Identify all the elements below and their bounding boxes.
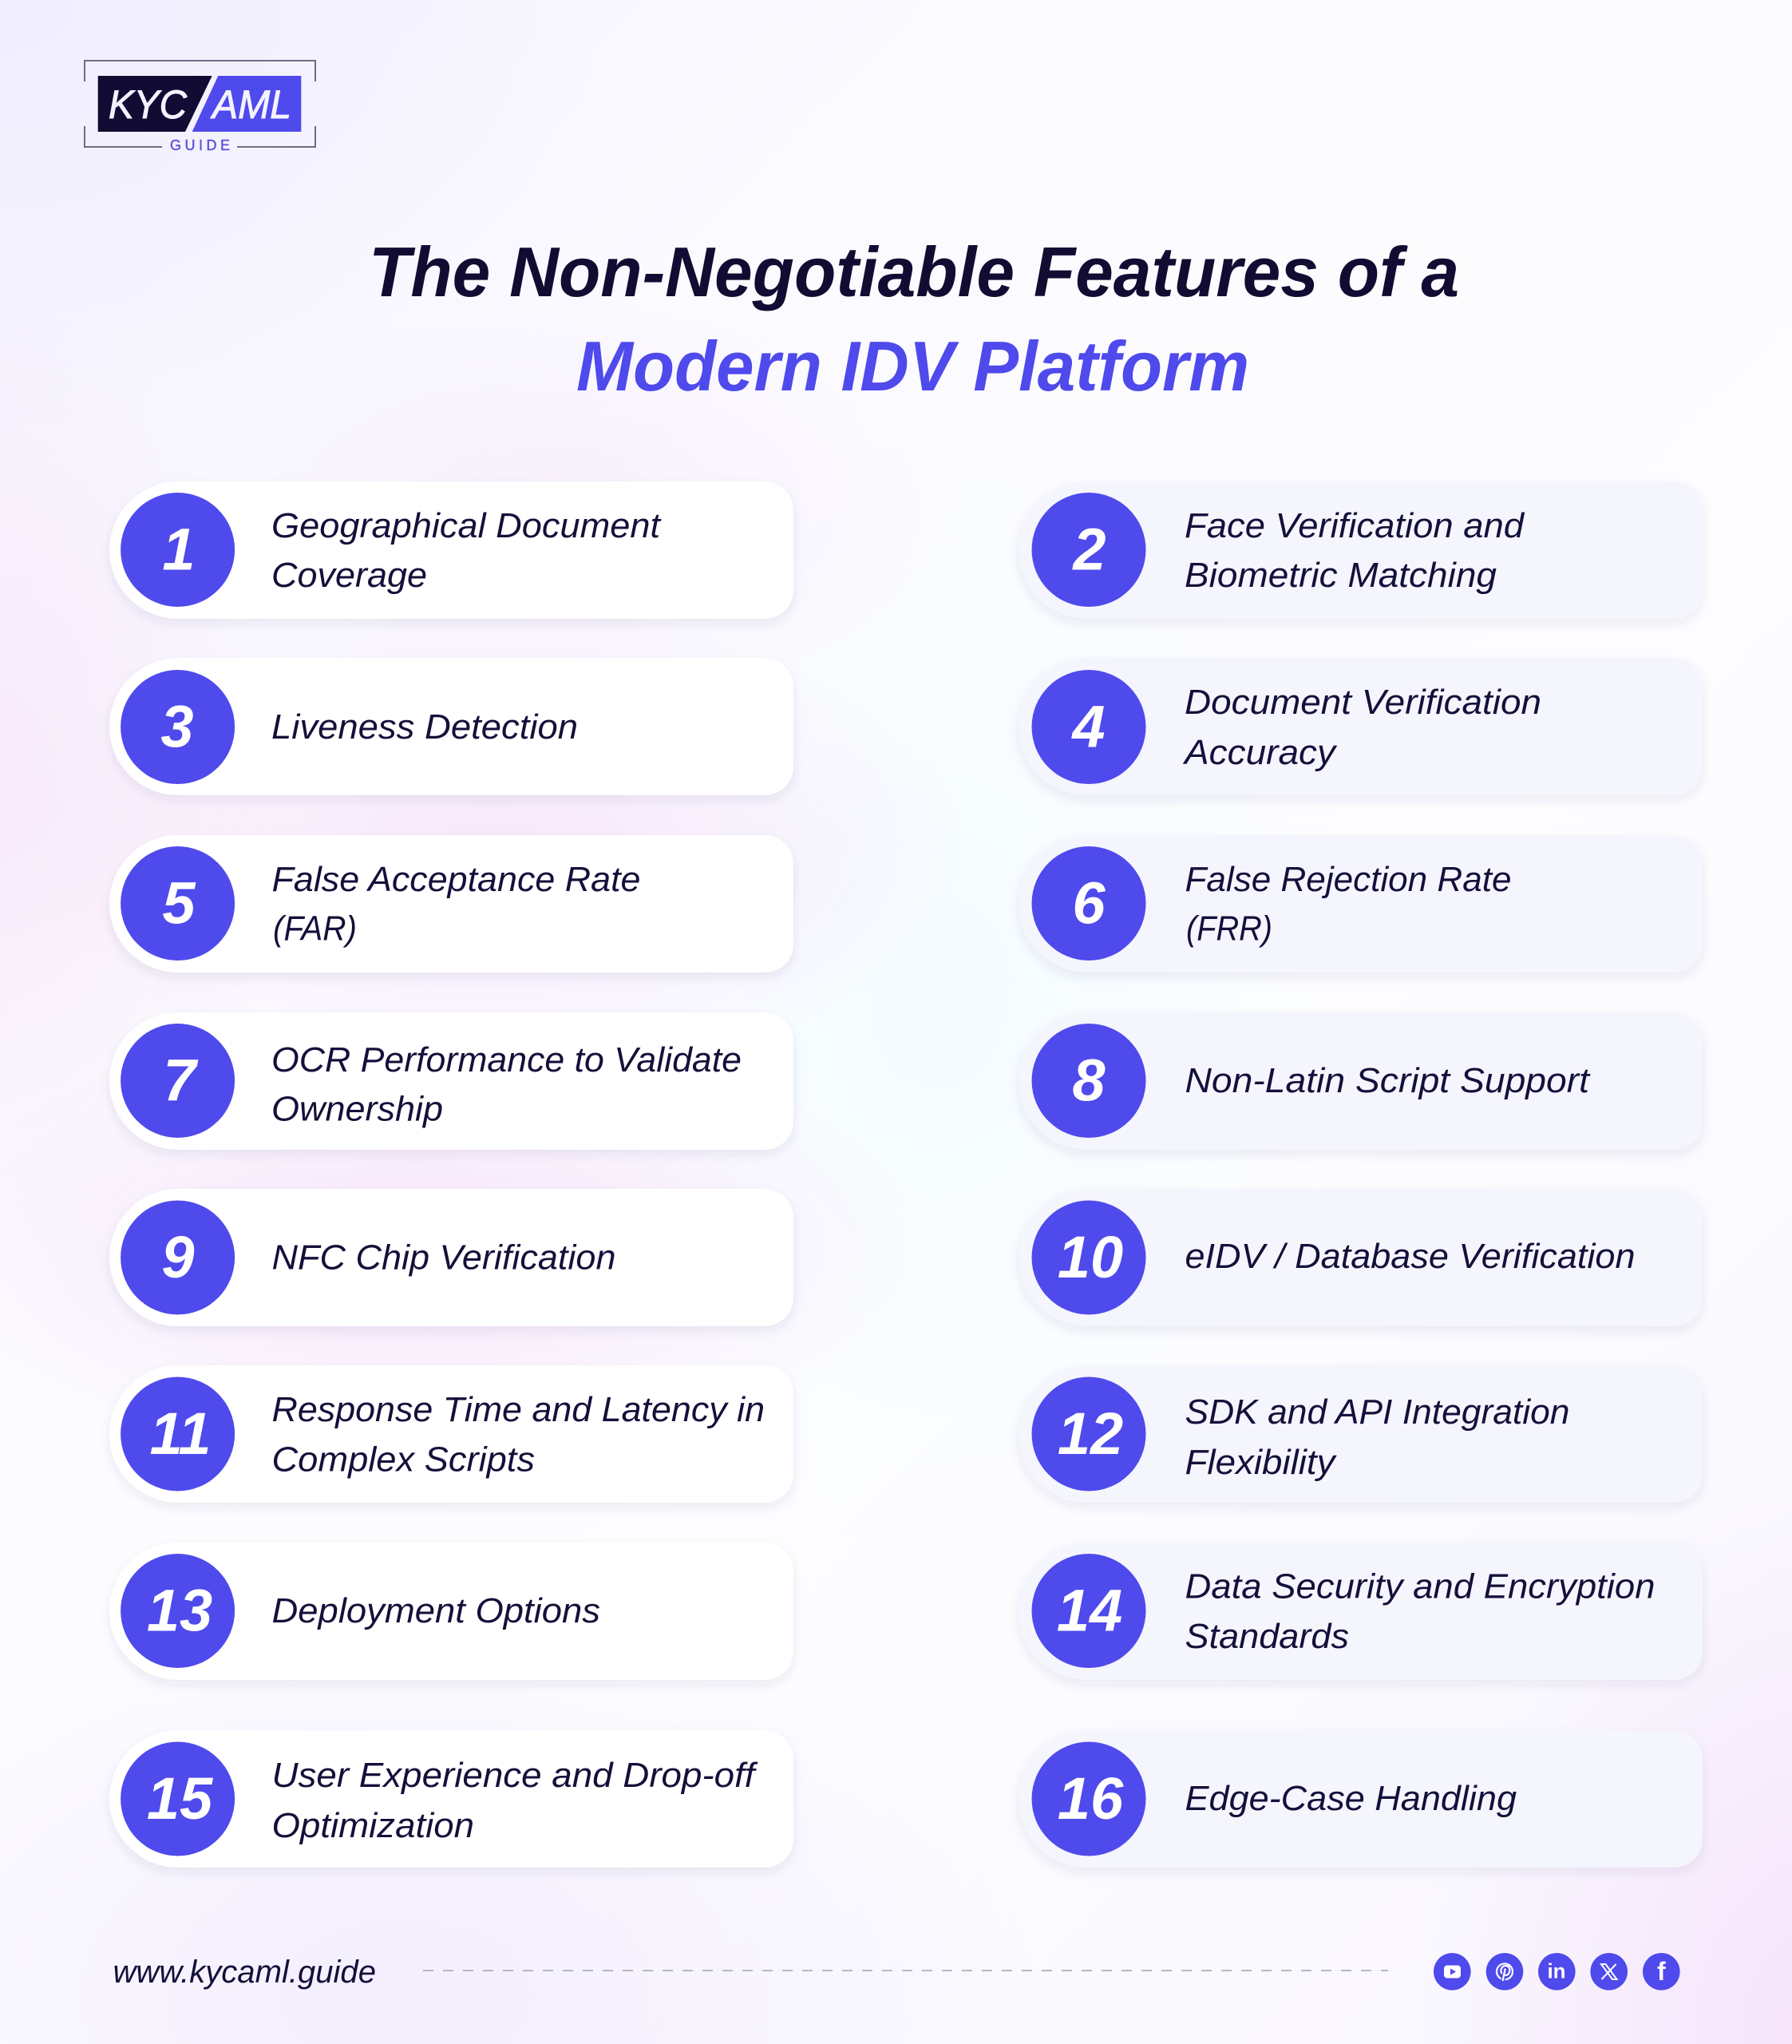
feature 5: [109, 835, 793, 972]
feature 13: [109, 1543, 793, 1680]
icon: linkedin: in: [1547, 1959, 1566, 1983]
feature 14: 14: [1057, 1578, 1122, 1643]
feature 14: [1019, 1543, 1703, 1680]
feature 6: False Rejection Rate: [1185, 860, 1512, 899]
feature 1: [109, 481, 793, 619]
feature 10: [1019, 1189, 1703, 1326]
feature 2: Face Verification and: [1185, 506, 1525, 545]
feature 5: False Acceptance Rate: [271, 860, 640, 899]
feature 7: OCR Performance to Validate: [271, 1040, 742, 1079]
feature 9: [109, 1189, 793, 1326]
logo: KYC/AML Guide: GUIDE: [170, 137, 230, 153]
feature 6: (FRR): [1186, 909, 1272, 949]
feature 15: [109, 1730, 793, 1868]
icon: youtube: [1434, 1953, 1471, 1991]
feature 10: 10: [1058, 1224, 1123, 1290]
feature 6: 6: [1072, 870, 1106, 936]
feature 7: 7: [163, 1048, 199, 1113]
feature 13: Deployment Options: [271, 1591, 600, 1630]
footer dashed line: [423, 1970, 1388, 1971]
feature 16: [1019, 1730, 1703, 1868]
feature 4: [1019, 658, 1703, 795]
feature 8: [1019, 1012, 1703, 1150]
feature 9: NFC Chip Verification: [271, 1238, 616, 1278]
feature 12: Flexibility: [1185, 1443, 1338, 1482]
feature 2: [1019, 481, 1703, 619]
icon: pinterest: [1486, 1953, 1523, 1991]
feature 11: Complex Scripts: [271, 1440, 535, 1479]
feature 15: User Experience and Drop-off: [271, 1756, 758, 1795]
feature 4: Accuracy: [1182, 733, 1338, 772]
feature 11: 11: [150, 1400, 211, 1467]
feature 6: [1019, 835, 1703, 972]
feature 1: Geographical Document: [271, 506, 662, 545]
feature 5: (FAR): [273, 909, 357, 949]
feature 8: Non-Latin Script Support: [1185, 1061, 1591, 1100]
title: [369, 232, 1459, 406]
feature 1: Coverage: [271, 556, 427, 595]
feature 11: Response Time and Latency in: [271, 1390, 765, 1429]
title: Modern IDV Platform: [576, 327, 1249, 406]
feature 15: 15: [147, 1765, 214, 1832]
feature 3: [109, 658, 793, 795]
feature 3: Liveness Detection: [271, 707, 578, 747]
feature 7: Ownership: [271, 1089, 443, 1129]
feature 15: Optimization: [271, 1806, 474, 1845]
feature 16: 16: [1058, 1765, 1124, 1832]
logo: KYC/AML Guide: AML: [210, 82, 291, 127]
feature 2: 2: [1071, 516, 1106, 583]
feature 8: 8: [1072, 1048, 1106, 1113]
feature 4: 4: [1070, 693, 1106, 760]
feature 1: 1: [162, 516, 196, 583]
title: The Non-Negotiable Features of a: [369, 232, 1459, 311]
icon: x: [1590, 1953, 1628, 1991]
feature 14: Data Security and Encryption: [1185, 1567, 1656, 1606]
icon: linkedin: [1538, 1953, 1576, 1991]
feature 3: 3: [160, 693, 194, 760]
feature 12: 12: [1058, 1400, 1123, 1467]
feature 7: [109, 1012, 793, 1150]
logo: KYC/AML Guide: [85, 61, 315, 153]
feature 12: [1019, 1365, 1703, 1503]
feature 5: 5: [162, 870, 196, 936]
feature 16: Edge-Case Handling: [1185, 1779, 1517, 1818]
feature 9: 9: [161, 1224, 195, 1290]
feature 10: eIDV / Database Verification: [1185, 1237, 1635, 1276]
feature 13: 13: [147, 1578, 212, 1643]
feature 4: Document Verification: [1185, 683, 1541, 722]
feature 12: SDK and API Integration: [1185, 1392, 1569, 1432]
feature 14: Standards: [1185, 1617, 1349, 1656]
logo: KYC/AML Guide: KYC: [109, 82, 188, 127]
icon: facebook: [1643, 1953, 1680, 1991]
feature 2: Biometric Matching: [1185, 556, 1497, 595]
icon: facebook: f: [1657, 1957, 1666, 1986]
feature 11: [109, 1365, 793, 1503]
website url: www.kycaml.guide: [113, 1955, 376, 1990]
